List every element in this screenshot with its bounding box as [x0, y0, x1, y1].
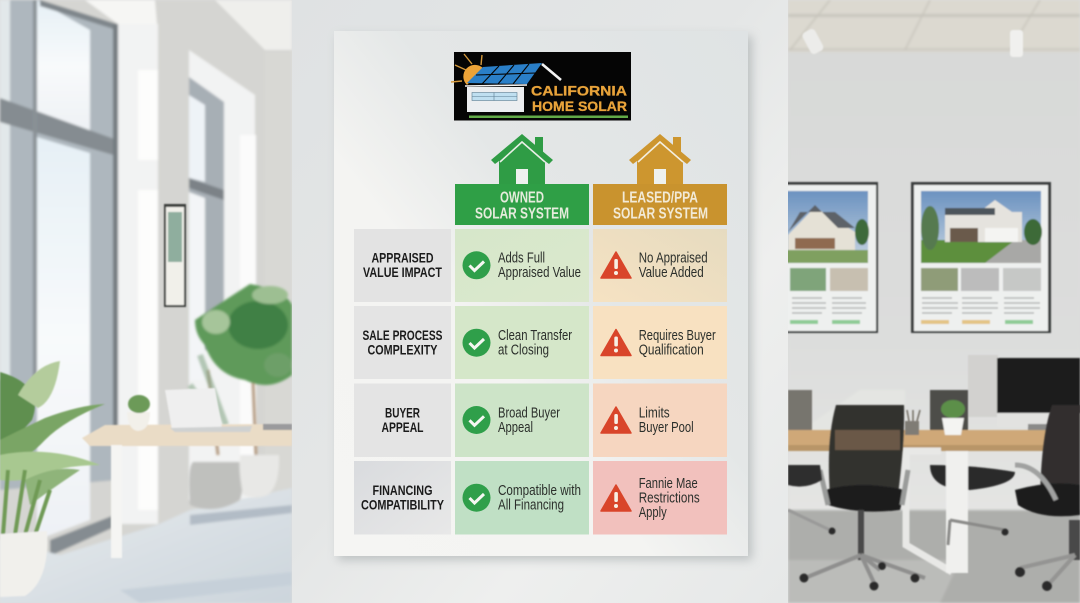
foreground plant and pot: [0, 361, 105, 597]
leased cell: requires buyer qualification: Requires Buyer: [639, 328, 716, 344]
label: sale process complexity: COMPLEXITY: [368, 342, 438, 358]
leased cell: Fannie Mae restrictions apply: Restrictions: [639, 490, 700, 506]
owned cell: adds full appraised value: Appraised Value: [498, 265, 581, 281]
owned cell: adds full appraised value: [455, 229, 589, 302]
wall art: small framed print: [164, 204, 186, 307]
owned cell: broad buyer appeal: Broad Buyer: [498, 406, 560, 422]
label: buyer appeal: APPEAL: [382, 419, 424, 435]
office chairs behind desk: [788, 465, 1008, 545]
label: sale process complexity: [354, 306, 451, 379]
framed property poster, right: [911, 182, 1051, 333]
leased cell: no appraised value added: No Appraised: [639, 250, 708, 266]
leased cell: Fannie Mae restrictions apply: Fannie Mae: [639, 476, 698, 492]
label: appraised value impact: APPRAISED: [372, 250, 434, 266]
leased cell: limits buyer pool: Limits: [639, 406, 670, 422]
row: financing compatibility: [354, 461, 727, 534]
icon: gold house: [629, 134, 691, 184]
leased cell: requires buyer qualification: [593, 306, 727, 379]
label: sale process complexity: SALE PROCESS: [362, 327, 442, 343]
office chair, right: [1015, 405, 1080, 591]
row: appraised value impact: [354, 229, 727, 302]
label: financing compatibility: COMPATIBILITY: [361, 497, 445, 513]
logo wordmark: HOME SOLAR: [532, 98, 627, 114]
owned cell: clean transfer at closing: [455, 306, 589, 379]
framed property poster, left: [786, 182, 878, 333]
leased cell: requires buyer qualification: Qualification: [639, 343, 704, 359]
owned cell: clean transfer at closing: at Closing: [498, 343, 549, 359]
tree and pots: [189, 284, 292, 509]
logo: California Home Solar: [451, 52, 631, 120]
leased cell: limits buyer pool: Buyer Pool: [639, 420, 694, 436]
leased cell: Fannie Mae restrictions apply: [593, 461, 727, 534]
owned cell: compatible with all financing: [455, 461, 589, 534]
central wall column: [292, 0, 788, 603]
label: financing compatibility: FINANCING: [372, 482, 433, 498]
row: sale process complexity: [354, 306, 727, 379]
background: right office: [788, 0, 1080, 603]
owned cell: compatible with all financing: All Financing: [498, 498, 564, 514]
office chair, centre: [800, 405, 925, 590]
header: owned solar system: OWNED: [500, 190, 544, 206]
background: left office with windows: [0, 0, 292, 603]
desk with plant and pencil cup: [788, 390, 1050, 573]
header: leased/PPA solar system: LEASED/PPA: [622, 190, 698, 206]
leased cell: limits buyer pool: [593, 384, 727, 457]
header: leased/PPA solar system: [593, 184, 727, 225]
logo sun: [451, 54, 483, 85]
header: owned solar system: SOLAR SYSTEM: [475, 206, 569, 222]
owned cell: compatible with all financing: Compatible with: [498, 483, 581, 499]
owned cell: adds full appraised value: Adds Full: [498, 250, 545, 266]
header: leased/PPA solar system: SOLAR SYSTEM: [613, 206, 708, 222]
owned cell: broad buyer appeal: [455, 384, 589, 457]
monitors: [968, 355, 1080, 436]
label: buyer appeal: [354, 384, 451, 457]
logo garage: [467, 87, 524, 112]
table, laptop and small plant: [82, 388, 292, 558]
label: financing compatibility: [354, 461, 451, 534]
label: buyer appeal: BUYER: [385, 404, 420, 420]
poster drop shadow: [338, 36, 752, 560]
leased cell: Fannie Mae restrictions apply: Apply: [639, 505, 667, 521]
leased cell: no appraised value added: [593, 229, 727, 302]
logo wordmark: CALIFORNIA: [531, 82, 627, 98]
poster panel: [334, 31, 748, 556]
icon: green house: [491, 134, 553, 184]
row: buyer appeal: [354, 384, 727, 457]
leased cell: no appraised value added: Value Added: [639, 265, 704, 281]
owned cell: broad buyer appeal: Appeal: [498, 420, 533, 436]
logo roof solar panels: [465, 63, 561, 86]
label: appraised value impact: [354, 229, 451, 302]
label: appraised value impact: VALUE IMPACT: [363, 264, 442, 280]
header: owned solar system: [455, 184, 589, 225]
logo wordmark: [531, 82, 627, 114]
ceiling track lights: [801, 28, 1023, 57]
owned cell: clean transfer at closing: Clean Transfer: [498, 328, 572, 344]
